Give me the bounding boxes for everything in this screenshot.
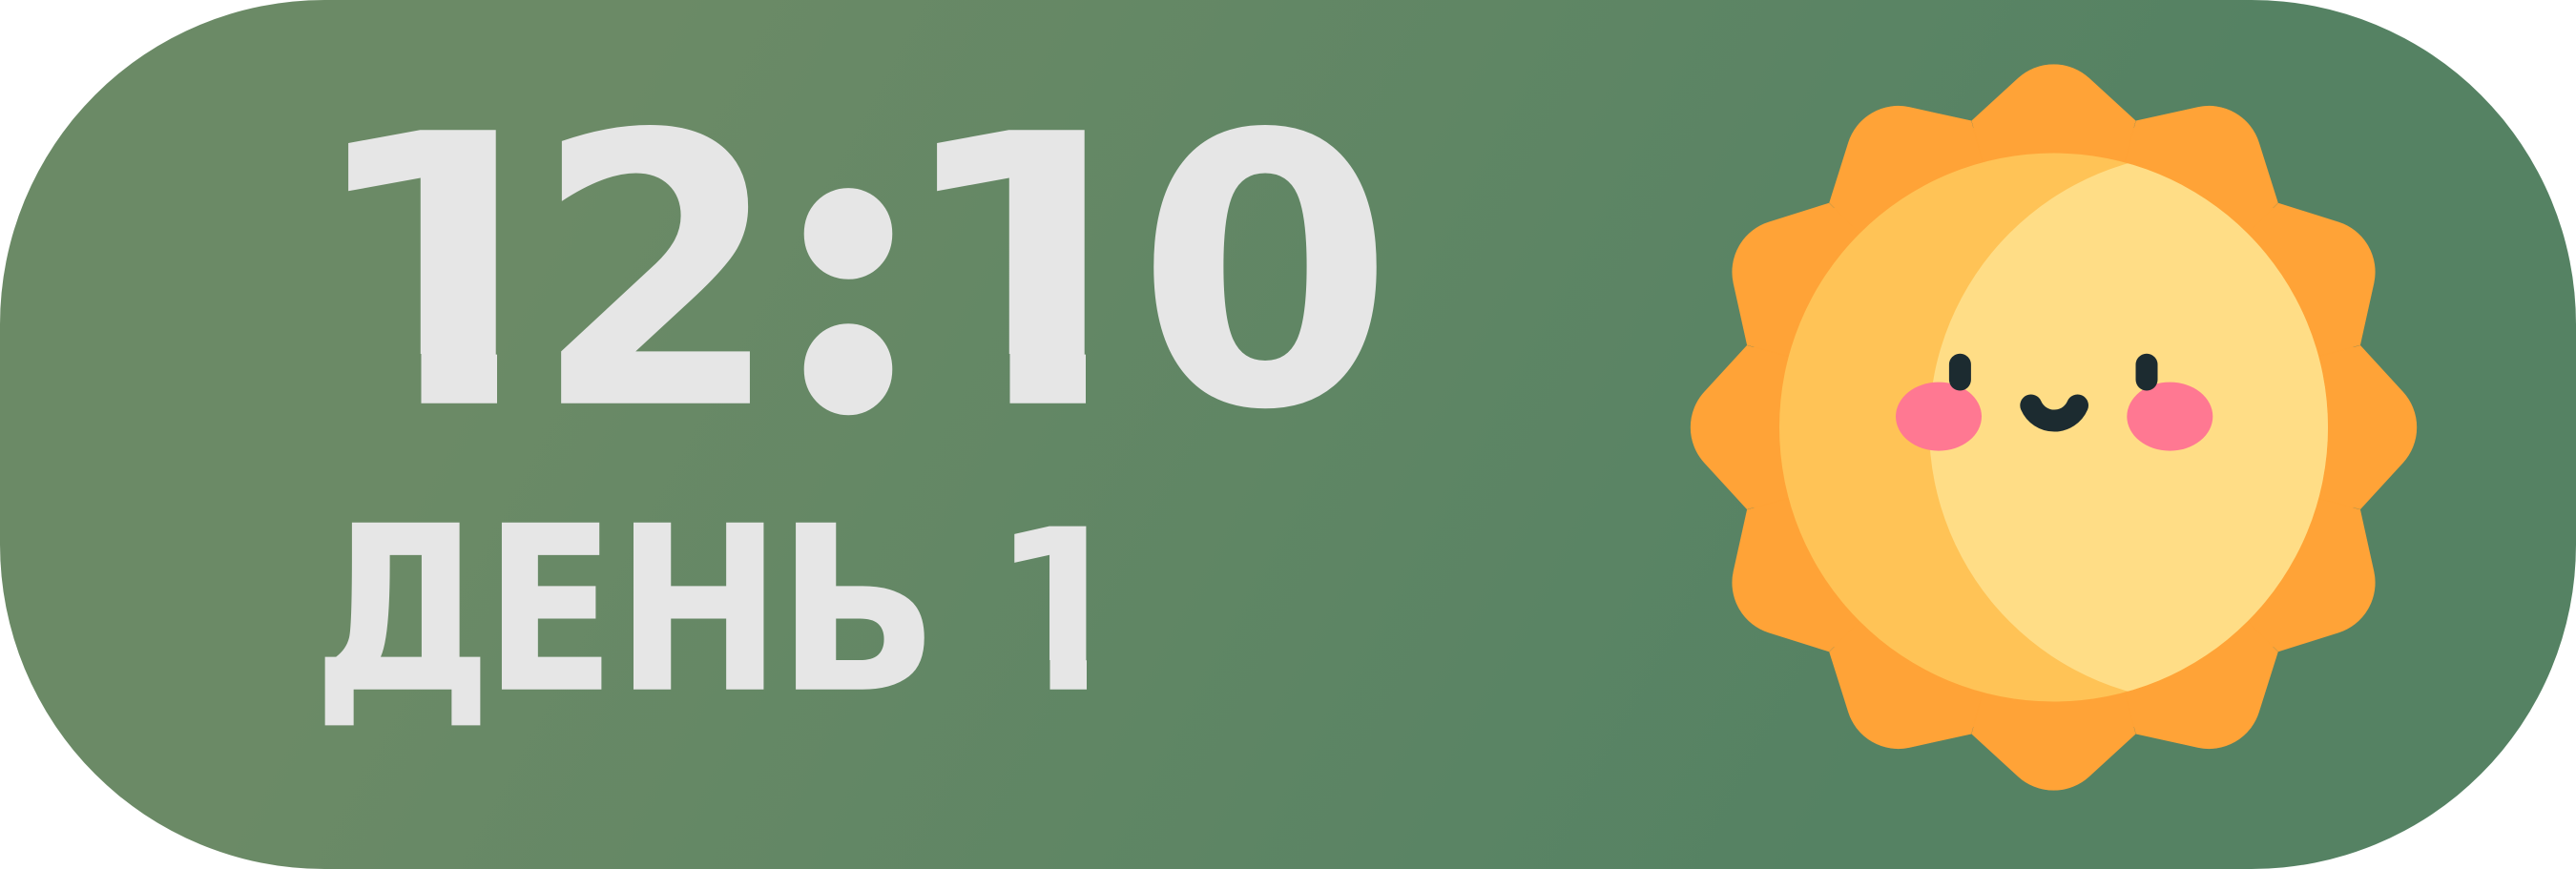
day label [324, 523, 1087, 725]
clock time heading: 1 [889, 55, 1184, 491]
right eye [2135, 364, 2158, 380]
icon: smiling sun [1691, 65, 2479, 790]
day label: 1 [991, 483, 1134, 743]
sun disc highlight [1930, 163, 2328, 692]
day label: Д [313, 478, 492, 744]
day label: Н [615, 478, 782, 744]
day label: Е [484, 478, 615, 744]
sun disc shadow [1779, 153, 2328, 702]
clock time heading: 1 [301, 55, 595, 491]
day label: Ь [776, 477, 940, 744]
smile [2031, 405, 2078, 421]
left eye [1949, 364, 1971, 380]
clock time heading: : [790, 0, 906, 503]
clock time heading: 0 [1136, 56, 1394, 492]
sun rays [1691, 65, 2417, 790]
right cheek [2127, 383, 2212, 451]
clock time heading [348, 125, 1377, 416]
clock time heading: 2 [533, 56, 780, 492]
left cheek [1896, 383, 1982, 451]
